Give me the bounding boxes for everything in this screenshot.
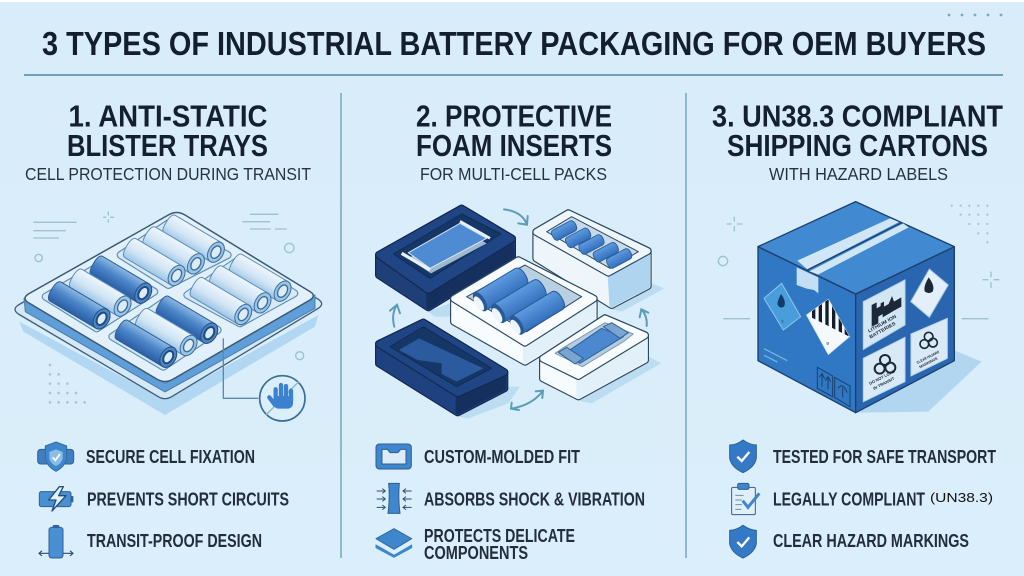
heading: blister trays: 1. ANTI-STATIC — [68, 98, 268, 134]
label: biohazard lower right: CLEAR HAZARD — [916, 350, 940, 365]
decorative dots top right — [948, 14, 1002, 16]
bullet: legally compliant: LEGALLY COMPLIANT — [773, 490, 925, 510]
label: biohazard lower left: DO NOT LOAD — [868, 369, 896, 386]
label: biohazard lower right: MARKINGS — [919, 356, 939, 369]
handling marks — [764, 349, 850, 407]
pocket: left batteries — [46, 254, 155, 332]
bullet: prevents short circuits — [39, 487, 289, 511]
panel: anti-static blister trays — [15, 98, 322, 558]
bullet: custom-molded fit: CUSTOM-MOLDED FIT — [424, 447, 580, 467]
bullet: legally compliant — [732, 483, 993, 515]
label: lithium ion batteries: BATTERIES — [868, 321, 896, 340]
pocket: right batteries — [187, 252, 294, 328]
heading: foam inserts: FOAM INSERTS — [416, 128, 612, 163]
label: small flame diamond — [764, 283, 801, 330]
heading: blister trays — [67, 98, 268, 163]
panel: UN38.3 shipping cartons — [712, 98, 1003, 558]
label: lithium ion batteries — [863, 280, 905, 349]
bullet: secure cell fixation: SECURE CELL FIXATION — [86, 447, 255, 467]
bullet: clear hazard markings — [730, 525, 969, 558]
panel: protective foam inserts — [376, 98, 664, 563]
bullet: legally compliant: (UN38.3) — [930, 490, 993, 505]
bullet: clear hazard markings: CLEAR HAZARD MARKINGS — [773, 531, 969, 551]
bullet: protects delicate components — [376, 526, 575, 563]
bullet: transit-proof design: TRANSIT-PROOF DESIGN — [87, 531, 262, 551]
arrows: assembly flow — [390, 209, 648, 410]
bullet: tested for safe transport — [730, 440, 996, 473]
carton tape — [797, 218, 909, 293]
illustration: foam inserts — [379, 209, 664, 418]
illustration: shipping carton — [718, 202, 999, 413]
subheading: cell protection: CELL PROTECTION DURING TRANSIT — [25, 164, 311, 184]
foam: bottom right white box with pack — [543, 318, 645, 396]
heading: blister trays: BLISTER TRAYS — [67, 128, 268, 163]
bullet: transit-proof design — [39, 525, 262, 558]
bullet: protects delicate components: PROTECTS DELICATE — [424, 526, 575, 546]
foam: central white box with three cells — [454, 260, 594, 362]
illustration: blister tray — [15, 212, 322, 421]
heading: foam inserts: 2. PROTECTIVE — [416, 98, 612, 134]
bullet: protects delicate components: COMPONENTS — [424, 543, 528, 563]
pocket: bottom batteries — [112, 294, 221, 370]
bullet: secure cell fixation — [38, 442, 255, 471]
label: class 9 stripes: 9 — [826, 341, 829, 346]
foam: dark empty tray — [379, 323, 504, 412]
bullet: custom-molded fit — [376, 444, 580, 469]
bullet: prevents short circuits: PREVENTS SHORT CIRCUITS — [87, 490, 289, 510]
icon: no touch hand — [260, 376, 305, 421]
heading: foam inserts — [416, 98, 612, 163]
label: biohazard lower left: IN TRANSIT — [872, 376, 896, 391]
subheading: multi-cell packs: FOR MULTI-CELL PACKS — [420, 164, 607, 184]
label: small flame diamond: 3 — [781, 319, 784, 324]
label: biohazard lower left — [863, 337, 905, 402]
bullet: absorbs shock — [377, 483, 645, 513]
foam: top right white box with five cells — [536, 213, 648, 305]
label: flame diamond — [911, 269, 948, 317]
bullet: absorbs shock: ABSORBS SHOCK & VIBRATION — [424, 490, 645, 510]
subheading: hazard labels: WITH HAZARD LABELS — [769, 164, 948, 184]
label: biohazard lower right — [911, 318, 947, 376]
foam: dark box with prismatic cell — [379, 209, 512, 307]
heading: shipping cartons — [712, 98, 1003, 163]
label: class 9 stripes — [807, 297, 849, 354]
label: lithium ion batteries: LITHIUM ION — [867, 313, 898, 334]
pocket: top batteries — [121, 213, 228, 289]
carton faces — [758, 202, 954, 413]
